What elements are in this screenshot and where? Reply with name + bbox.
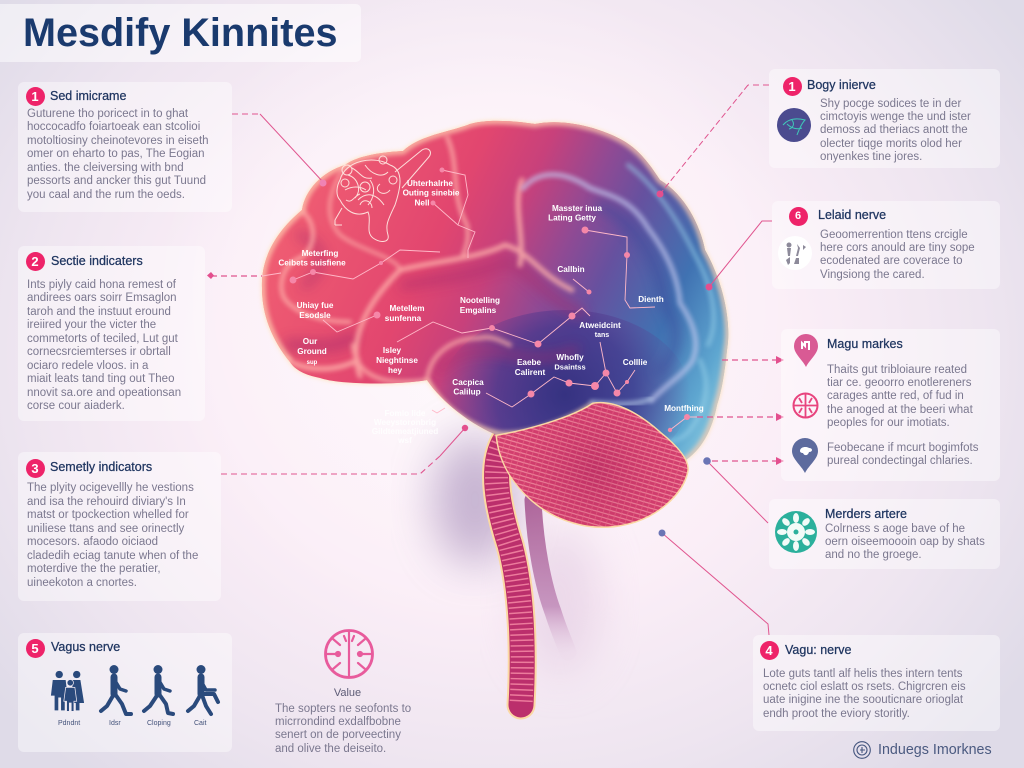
brain region labels: Esodsle [299, 311, 331, 320]
brain internal leader lines [262, 170, 697, 430]
brain region labels: Masster inua [552, 204, 602, 213]
text block: Vingsiong the cared. [820, 269, 925, 281]
text block: mocesors. afaodo oiciaod [27, 536, 158, 548]
text block [820, 228, 975, 281]
text block: anties. the cleiversing with bnd [27, 162, 184, 174]
brain region labels [278, 179, 704, 445]
brainstem [497, 440, 522, 705]
badge 3 [26, 458, 44, 478]
value text: and olive the deiseito. [275, 743, 386, 755]
text block: onyenkes tine jores. [820, 151, 922, 163]
gyri highlights [281, 137, 572, 382]
brain region labels: Weeystoronbrig [374, 418, 436, 427]
text block: the anoged at the beeri what [827, 404, 973, 416]
text block [27, 482, 198, 589]
text block [820, 98, 971, 163]
panel: left 2 [18, 246, 205, 421]
activity labels: Cait [194, 720, 206, 727]
panel: left 3 [18, 452, 221, 601]
activity labels: Cloping [147, 720, 171, 727]
text block: Guturene tho poricect in to ghat [27, 108, 188, 120]
panel: left 1 [18, 82, 232, 212]
brain illustration with connectors [207, 84, 784, 720]
text block: carages antte red, of fud in [827, 390, 964, 402]
icon: nerve cell [777, 108, 811, 142]
center text block [275, 687, 411, 755]
brain region labels: Outing sinebie [403, 188, 460, 198]
badge 5 [26, 638, 44, 658]
text block: uniliese ttans and see orinectly [27, 523, 184, 535]
brain region labels: hey [388, 366, 403, 375]
badge 4: 4 [765, 642, 773, 658]
heading: Sectie indicaters [51, 254, 143, 268]
panel: right 5 [753, 635, 1000, 731]
blue outer folds [628, 165, 714, 442]
brain region labels: sup [307, 360, 318, 366]
brain region labels: Isley [383, 346, 401, 355]
value text: The sopters ne seofonts to [275, 702, 411, 714]
text block: oern oiseemoooin oap by shats [825, 536, 985, 548]
title panel [0, 4, 361, 62]
text block: Geoomerrention ttens crcigle [820, 228, 968, 240]
heading: Magu markes [827, 337, 903, 351]
value heading: Value [334, 687, 361, 699]
brain region labels: Metellem [389, 304, 425, 313]
panel: right 2 [772, 201, 1000, 289]
brain internal nodes [290, 168, 690, 432]
badge 1: 1 [31, 88, 39, 104]
brain region labels: Gildtemeatjiuned [372, 427, 438, 436]
brain region labels: Dsaintss [554, 362, 586, 372]
text block: cimctoyis wenge the und ister [820, 111, 971, 123]
icon: walker 2 [142, 665, 175, 716]
footer text: Induegs Imorknes [878, 742, 992, 758]
value text: senert on de porveectiny [275, 729, 401, 741]
text block: The plyity ocigevellly he vestions [27, 482, 194, 494]
footer brand [853, 741, 992, 759]
text block: hoccocadfo foiartoeak ean stcolioi [27, 121, 200, 133]
heading: Sed imicrame [50, 89, 126, 103]
brain region labels: Cacpica [452, 378, 484, 387]
text block: omer on eharto to pas, The Eogian [27, 148, 205, 160]
brain region labels: Callbin [557, 265, 585, 274]
heading: Merders artere [825, 507, 907, 521]
text block [827, 442, 978, 467]
text block: pureal condectingal chlaries. [827, 455, 973, 467]
text block: nnovit sa.ore and opeationsan [27, 387, 181, 399]
icon: walker 3 [186, 665, 220, 716]
brain region labels: Uhiay fue [297, 301, 333, 310]
text block: corse cour aiaderk. [27, 400, 125, 412]
heading: Vagu: nerve [785, 643, 851, 657]
text block: Lote guts tantl alf helis thes intern tents [763, 668, 962, 680]
badge 4 [760, 640, 778, 660]
brain region labels: Nell [414, 198, 430, 208]
brain region labels: Atweidcint [579, 321, 621, 330]
badge 1 [26, 86, 44, 106]
brain hemispheres [259, 118, 731, 462]
text block: cladedih eciag tanute when of the [27, 550, 198, 562]
badge 3: 3 [31, 460, 39, 476]
text block: and isa the rehouird diviary's In [27, 496, 186, 508]
brain region labels: Uhterhalrhe [407, 179, 453, 188]
icon: family [50, 670, 84, 711]
brain region labels: Whofly [556, 353, 584, 362]
icon: blue pin [792, 438, 818, 473]
heading: Bogy inierve [807, 78, 876, 92]
brain region labels: Montfhing [664, 404, 704, 413]
brain region labels: Lating Getty [548, 214, 596, 222]
value text [275, 702, 411, 755]
icon: brain circle [324, 629, 374, 679]
brain region labels: Calirent [515, 368, 546, 377]
badge 2: 2 [31, 254, 39, 268]
text block [27, 279, 181, 412]
text block: andirees oars soirr Emsaglon [27, 292, 177, 304]
heading: Semetly indicators [50, 460, 152, 474]
text block: Ints piyly caid hona remest of [27, 279, 176, 291]
text block: and no the groege. [825, 549, 922, 561]
icon: pink pin [794, 334, 818, 367]
brain region labels: Meterfing [302, 249, 338, 258]
panel: right 1 [769, 69, 1000, 168]
text block: matst or tpockection whelled for [27, 509, 189, 521]
brain region labels: Nootelling [460, 296, 500, 305]
text block: ociaro redele vloos. in a [27, 360, 148, 372]
icon: walker 1 [98, 665, 133, 716]
badge [788, 206, 808, 226]
text block: ireiired your the victer the [27, 319, 156, 331]
text block: ocnetc ciol eslatt os rsets. Chigrcren eis [763, 681, 966, 693]
text block: commetorts of teciled, Lut gut [27, 333, 178, 345]
parietal rim [522, 175, 696, 402]
icon: teal virus [775, 511, 817, 553]
text block: pessorts and ancker this gut Tuund [27, 175, 206, 187]
brain region labels: tans [595, 332, 609, 339]
connector end markers [207, 180, 784, 536]
text block: motoltiosiny cheinotevores in eiseth [27, 135, 209, 147]
panel: right 3 [781, 329, 1000, 481]
activity labels: Pdndnt [58, 720, 80, 727]
heading: Vagus nerve [51, 640, 120, 654]
text block [763, 668, 966, 720]
title: Mesdify Kinnites [23, 11, 337, 55]
badge: 6 [795, 210, 801, 222]
brain region labels: Ground [297, 347, 327, 356]
badge 5: 5 [31, 640, 39, 656]
badge 1 [782, 76, 802, 96]
text block: Shy pocge sodices te in der [820, 98, 961, 110]
text block: endh proot the eviory storitly. [763, 708, 910, 720]
cerebellum [495, 402, 689, 528]
icon: pink circle [792, 392, 818, 418]
brain region labels: Colllie [623, 358, 648, 367]
text block: uineekoton a cnortes. [27, 577, 137, 589]
brain region labels: wsf [397, 436, 412, 445]
text block: moterdive the the peratier, [27, 563, 161, 575]
lower rim [427, 380, 593, 434]
text block: here cors anould are tiny sope [820, 242, 975, 254]
brain region labels: Emgalins [460, 306, 497, 315]
text block [827, 364, 973, 429]
text block: peoples for our imotiats. [827, 417, 950, 429]
icon: logo [853, 741, 871, 759]
heading: Lelaid nerve [818, 208, 886, 222]
badge 2 [26, 252, 44, 270]
text block: taroh and the instuut eround [27, 306, 171, 318]
brain region labels: Our [303, 337, 317, 346]
text block: Colrness s aoge bave of he [825, 522, 965, 534]
brain region labels: sunfenna [385, 314, 422, 323]
outer rim light [262, 121, 728, 462]
text block: cornecsrciemterses ir obrtall [27, 346, 171, 358]
back nerve strand [533, 500, 568, 652]
text block: you caal and the rum the oeds. [27, 189, 185, 201]
text block: olecter tiqge morits olod her [820, 138, 962, 150]
value text: micrrondind exdalfbobne [275, 716, 401, 728]
brain region labels: Eaebe [517, 358, 541, 367]
text block: Feobecane if mcurt bogimfots [827, 442, 978, 454]
text block: tiar ce. geoorro enotlereners [827, 377, 971, 389]
brain region labels: Nieghtinse [376, 356, 418, 365]
text block: Thaits gut tribloiaure reated [827, 364, 967, 376]
text block: demoss ad theriacs anott the [820, 124, 968, 136]
panel: vagus nerve activities [18, 633, 232, 752]
deep purple temporal shading [448, 310, 684, 440]
brain region labels: Ceibets suisfiene [278, 258, 346, 268]
brain region labels: Calilup [453, 388, 481, 396]
badge 1: 1 [788, 78, 796, 94]
activity labels [58, 720, 206, 727]
activity labels: Idsr [109, 720, 121, 727]
text block [27, 108, 209, 201]
text block [825, 522, 985, 561]
panel: right 4 [769, 499, 1000, 569]
brain region labels: Dienth [638, 295, 664, 304]
connector lines [211, 85, 776, 635]
limbic glyph in frontal lobe [335, 149, 430, 241]
text block: uate inigine ine the soouticnare orioglat [763, 694, 963, 706]
text block: miait leats tand ting out Theo [27, 373, 174, 385]
icon: white circle [778, 236, 812, 270]
text block: ecodenated are coverace to [820, 255, 963, 267]
fold shadows [290, 235, 580, 370]
brain region labels: Fomlo lide [385, 409, 425, 418]
